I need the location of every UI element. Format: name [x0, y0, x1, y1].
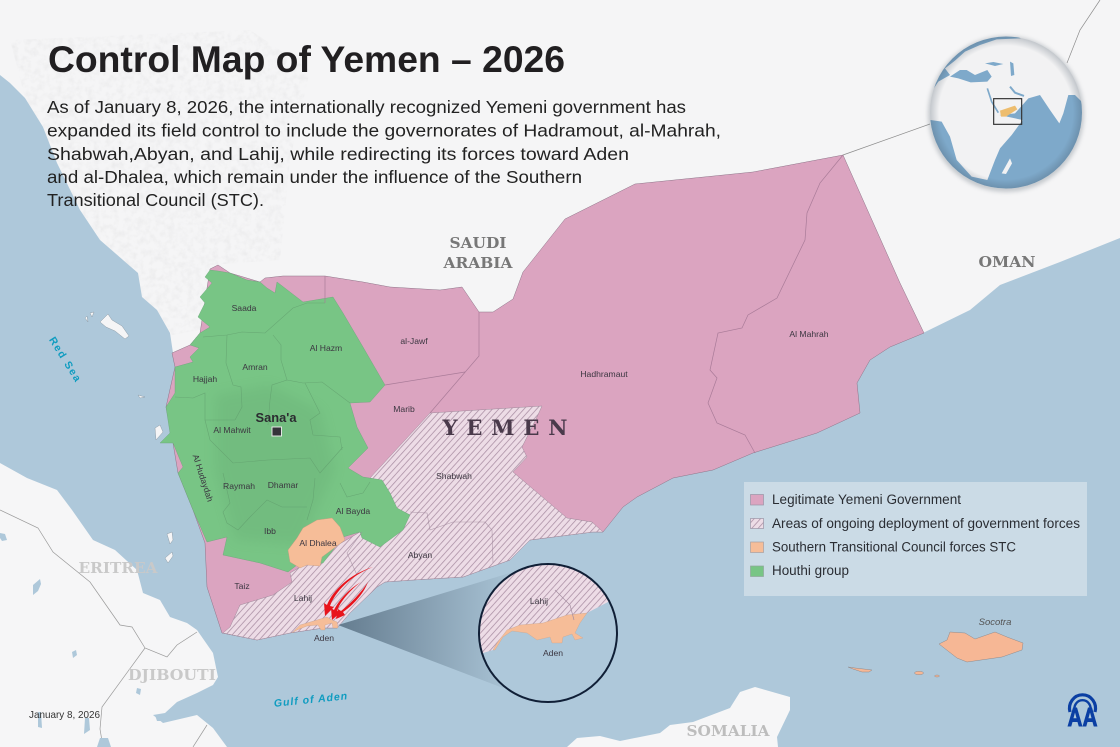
intro text: Shabwah,Abyan, and Lahij, while redirecting its forces toward Aden	[47, 144, 629, 164]
land: Horn of Africa west	[0, 463, 227, 747]
country labels	[78, 234, 1036, 740]
governorate labels: Al Mahrah	[789, 329, 829, 339]
island: Socotra	[848, 632, 1023, 677]
region: Areas of ongoing deployment	[223, 406, 603, 640]
governorate labels: Saada	[232, 303, 257, 313]
label: Socotra: Socotra	[979, 617, 1011, 628]
governorate labels: al-Jawf	[400, 336, 428, 346]
islands: Red Sea	[85, 312, 173, 563]
governorate labels: Aden	[314, 633, 334, 643]
locator globe	[926, 34, 1086, 194]
country labels: SAUDI	[450, 234, 506, 252]
capital: Sana'a	[256, 411, 298, 436]
sea labels: Red Sea	[46, 335, 84, 385]
legend item: Areas of ongoing deployment: Areas of ongoing deployment of government forces	[772, 516, 1080, 531]
zoom cone	[338, 573, 510, 688]
country labels: OMAN	[978, 253, 1036, 271]
legend item: Southern Transitional Council: Southern Transitional Council forces STC	[772, 540, 1016, 554]
country labels: ARABIA	[442, 254, 513, 272]
governorate labels: Amran	[242, 362, 268, 372]
governorate labels: Abyan	[408, 550, 432, 560]
land: Somalia	[567, 687, 790, 747]
governorate labels: Ibb	[264, 526, 276, 536]
region: Houthi group	[160, 270, 410, 572]
country labels: DJIBOUTI	[128, 666, 216, 684]
governorate labels: Marib	[393, 404, 415, 414]
governorate labels	[191, 303, 829, 643]
governorate labels: Hajjah	[193, 374, 217, 384]
legend	[744, 482, 1087, 596]
governorate labels: Raymah	[223, 481, 255, 491]
land: Arabian Peninsula	[0, 0, 1120, 360]
governorate labels: Shabwah	[436, 471, 472, 481]
governorate labels: Hadhramaut	[580, 369, 628, 379]
map: Yemen control areas	[160, 155, 924, 640]
intro text: As of January 8, 2026, the internationally recognized Yemeni government has	[47, 97, 686, 117]
sea labels	[46, 335, 349, 710]
highland relief on Houthi area	[215, 385, 335, 545]
governorate labels: Al Hudaydah	[191, 453, 215, 503]
legend item: Legitimate Yemeni Government: Legitimate Yemeni Government	[772, 492, 961, 507]
intro text: and al-Dhalea, which remain under the influence of the Southern	[47, 167, 582, 187]
inset label: Lahij: Lahij	[530, 596, 548, 606]
intro text: expanded its field control to include the governorates of Hadramout, al-Mahrah,	[47, 120, 721, 140]
country labels: YEMEN	[442, 415, 568, 440]
legend item: Houthi group: Houthi group	[772, 563, 849, 578]
governorate labels: Dhamar	[268, 480, 298, 490]
region: Southern Transitional Council, Al Dhalea	[288, 518, 345, 568]
country labels: SOMALIA	[686, 722, 770, 740]
governorate labels: Al Hazm	[310, 343, 342, 353]
governorate labels: Al Mahwit	[213, 425, 251, 435]
governorate labels: Lahij	[294, 593, 312, 603]
icon: agency logo: AA	[1068, 702, 1098, 732]
governorate boundaries	[175, 303, 370, 530]
intro text	[47, 97, 721, 210]
icon: agency logo	[1068, 695, 1098, 732]
arrows: advance toward Aden	[324, 567, 373, 620]
governorate labels: Taiz	[234, 581, 250, 591]
region: Southern Transitional Council, Aden	[292, 617, 338, 633]
capital: Sana'a: Sana'a	[256, 411, 298, 425]
governorate labels: Al Bayda	[336, 506, 370, 516]
title: Control Map of Yemen – 2026	[48, 39, 565, 80]
region: Legitimate Yemeni Government	[166, 155, 924, 640]
intro text: Transitional Council (STC).	[47, 190, 264, 210]
date: January 8, 2026	[29, 709, 100, 721]
governorate labels: Al Dhalea	[299, 538, 337, 548]
inset: Aden zoom circle	[478, 563, 618, 703]
country labels: ERITREA	[78, 559, 158, 577]
sea labels: Gulf of Aden	[273, 690, 349, 710]
inset label: Aden: Aden	[543, 648, 563, 658]
